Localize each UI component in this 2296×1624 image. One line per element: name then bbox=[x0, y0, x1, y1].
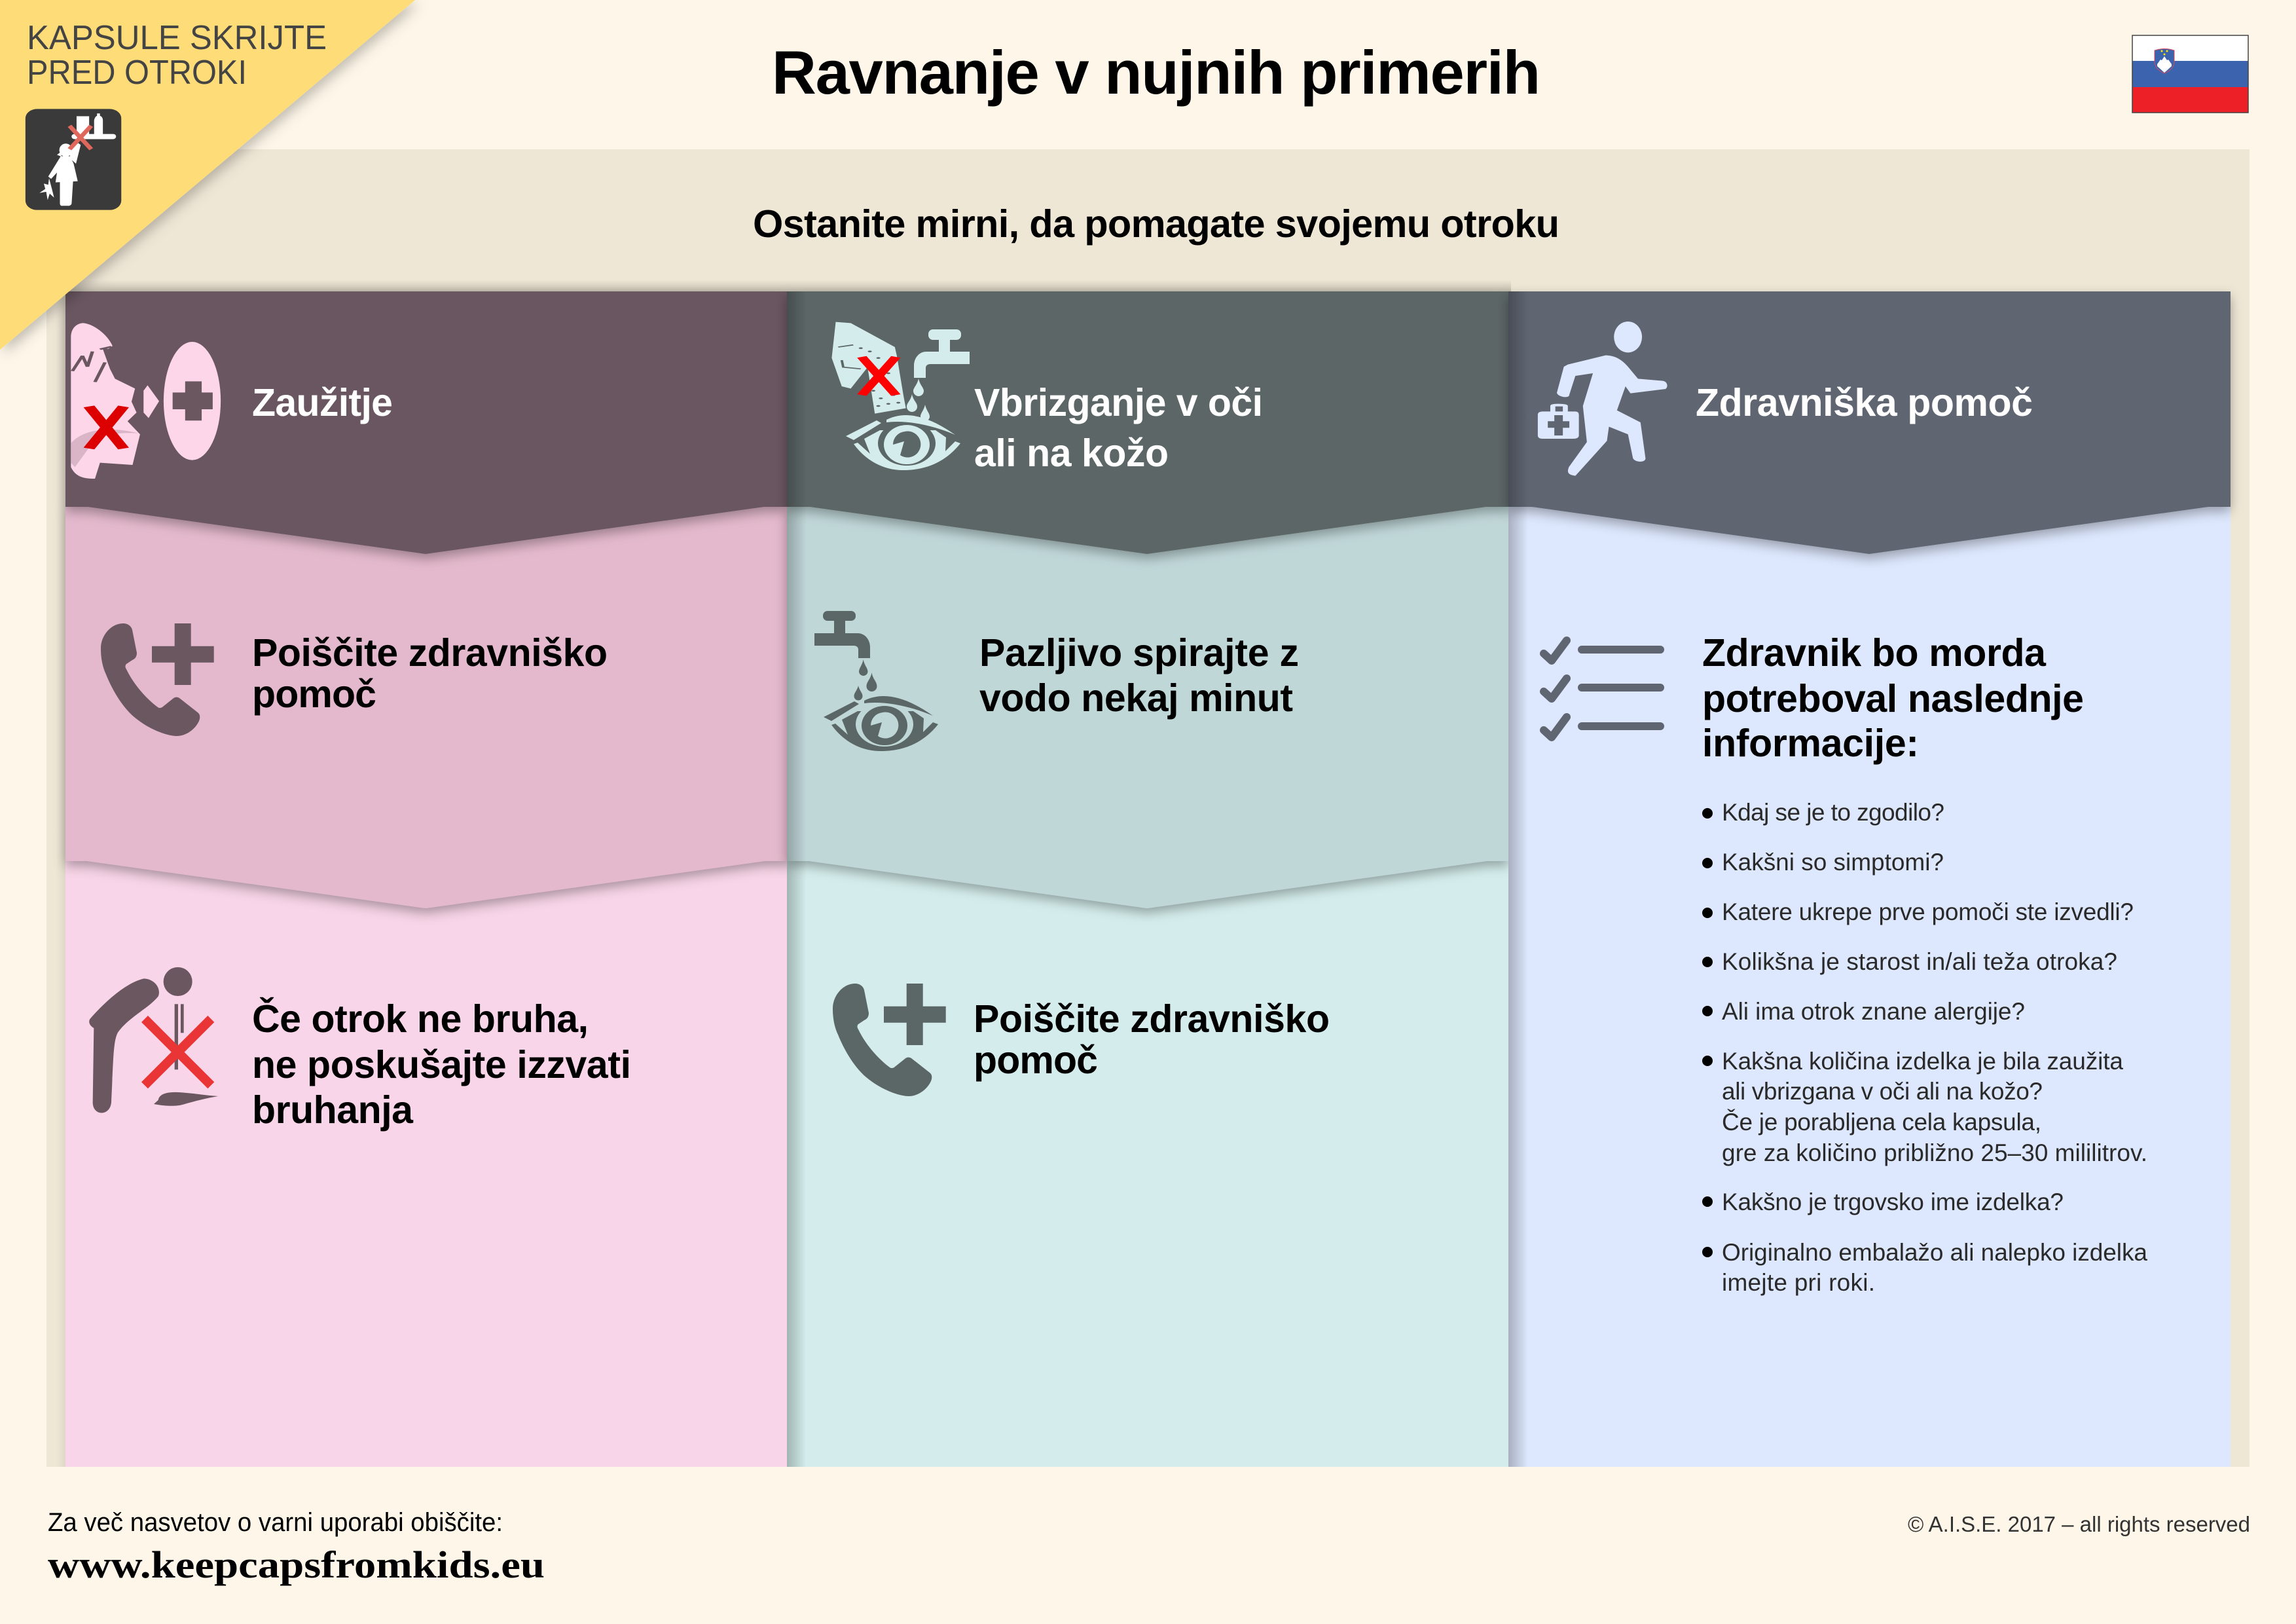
header band with chevron bbox=[787, 291, 1508, 554]
icon: eye bbox=[846, 415, 960, 470]
column edge shadow bbox=[787, 291, 807, 1467]
banner text: PRED OTROKI bbox=[27, 54, 247, 92]
text: doctor may need information: informacije: bbox=[1702, 722, 1919, 765]
text: doctor may need information: Zdravnik bo morda bbox=[1702, 631, 2047, 674]
heading: eye or skin contact: ali na kožo bbox=[974, 432, 1169, 475]
question text: Kakšna količina izdelka je bila zaužita bbox=[1722, 1048, 2123, 1075]
text: do not induce vomiting: bruhanja bbox=[252, 1088, 414, 1132]
header band with chevron bbox=[65, 291, 787, 554]
footer: website: www.keepcapsfromkids.eu bbox=[48, 1543, 545, 1586]
icon: do not induce vomiting bbox=[89, 967, 218, 1113]
text: rinse with water: Pazljivo spirajte z bbox=[979, 631, 1299, 674]
text: do not induce vomiting: Če otrok ne bruha, bbox=[252, 997, 589, 1041]
question text: imejte pri roki. bbox=[1722, 1269, 1875, 1296]
heading: medical help: Zdravniška pomoč bbox=[1696, 381, 2033, 424]
bottom band bbox=[787, 291, 1508, 1467]
icon: Slovenian flag bbox=[2132, 35, 2248, 113]
column edge shadow bbox=[1508, 291, 1528, 1467]
panel: medical help column bbox=[1508, 291, 2231, 1467]
text: seek medical help: Poiščite zdravniško bbox=[974, 997, 1330, 1041]
bottom band bbox=[65, 291, 787, 1467]
text: seek medical help: Poiščite zdravniško bbox=[252, 631, 608, 674]
icon: capsule pack with cross bbox=[831, 322, 906, 414]
text: do not induce vomiting: ne poskušajte izzvati bbox=[252, 1043, 631, 1086]
footer: more advice text: Za več nasvetov o varni uporabi obiščite: bbox=[48, 1508, 503, 1537]
footer: copyright: © A.I.S.E. 2017 – all rights reserved bbox=[1908, 1512, 2250, 1536]
text: seek medical help: pomoč bbox=[252, 673, 376, 716]
question text: ali vbrizgana v oči ali na kožo? bbox=[1722, 1078, 2043, 1105]
question text: Ali ima otrok znane alergije? bbox=[1722, 998, 2025, 1025]
list: information questions bbox=[1702, 799, 2147, 1296]
icon: checklist bbox=[1544, 640, 1660, 737]
title: Ravnanje v nujnih primerih bbox=[772, 38, 1540, 107]
text: rinse with water: vodo nekaj minut bbox=[979, 676, 1293, 720]
panel: eye and skin contact column bbox=[787, 291, 1508, 1467]
icon: water drops bbox=[907, 378, 930, 421]
question text: Kakšni so simptomi? bbox=[1722, 849, 1944, 876]
body band bbox=[1508, 291, 2231, 1467]
icon: tap bbox=[914, 329, 970, 378]
icon: runner with first aid kit bbox=[1538, 322, 1667, 476]
header band with chevron bbox=[1508, 291, 2231, 554]
question text: Kakšno je trgovsko ime izdelka? bbox=[1722, 1189, 2064, 1215]
question text: Če je porabljena cela kapsula, bbox=[1722, 1109, 2041, 1135]
banner text: KAPSULE SKRIJTE bbox=[27, 19, 327, 57]
subtitle: Ostanite mirni, da pomagate svojemu otroku bbox=[753, 202, 1559, 246]
question text: Kdaj se je to zgodilo? bbox=[1722, 799, 1944, 826]
heading: ingestion: Zaužitje bbox=[252, 381, 393, 424]
icon: phone and plus bbox=[101, 623, 214, 736]
question text: gre za količino približno 25–30 mililitrov. bbox=[1722, 1139, 2147, 1166]
question text: Originalno embalažo ali nalepko izdelka bbox=[1722, 1239, 2147, 1266]
panel: ingestion column bbox=[65, 291, 787, 1467]
heading: eye or skin contact: Vbrizganje v oči bbox=[974, 381, 1263, 424]
icon: phone and plus bbox=[833, 984, 946, 1096]
icon: face with no swallowing and medical cross bbox=[71, 323, 221, 479]
yellow triangle bbox=[0, 0, 415, 350]
middle band with chevron bbox=[65, 507, 787, 908]
icon: child reaching for shelf bbox=[26, 109, 121, 210]
corner banner: keep capsules away from children bbox=[0, 0, 415, 350]
question text: Katere ukrepe prve pomoči ste izvedli? bbox=[1722, 898, 2134, 925]
bullets bbox=[1702, 808, 1713, 1257]
text: seek medical help: pomoč bbox=[974, 1039, 1098, 1082]
panel: beige backdrop bbox=[46, 149, 2250, 1467]
question text: Kolikšna je starost in/ali teža otroka? bbox=[1722, 948, 2117, 975]
icon: tap over eye bbox=[814, 611, 938, 751]
text: doctor may need information: potreboval naslednje bbox=[1702, 677, 2084, 720]
middle band with chevron bbox=[787, 507, 1508, 908]
